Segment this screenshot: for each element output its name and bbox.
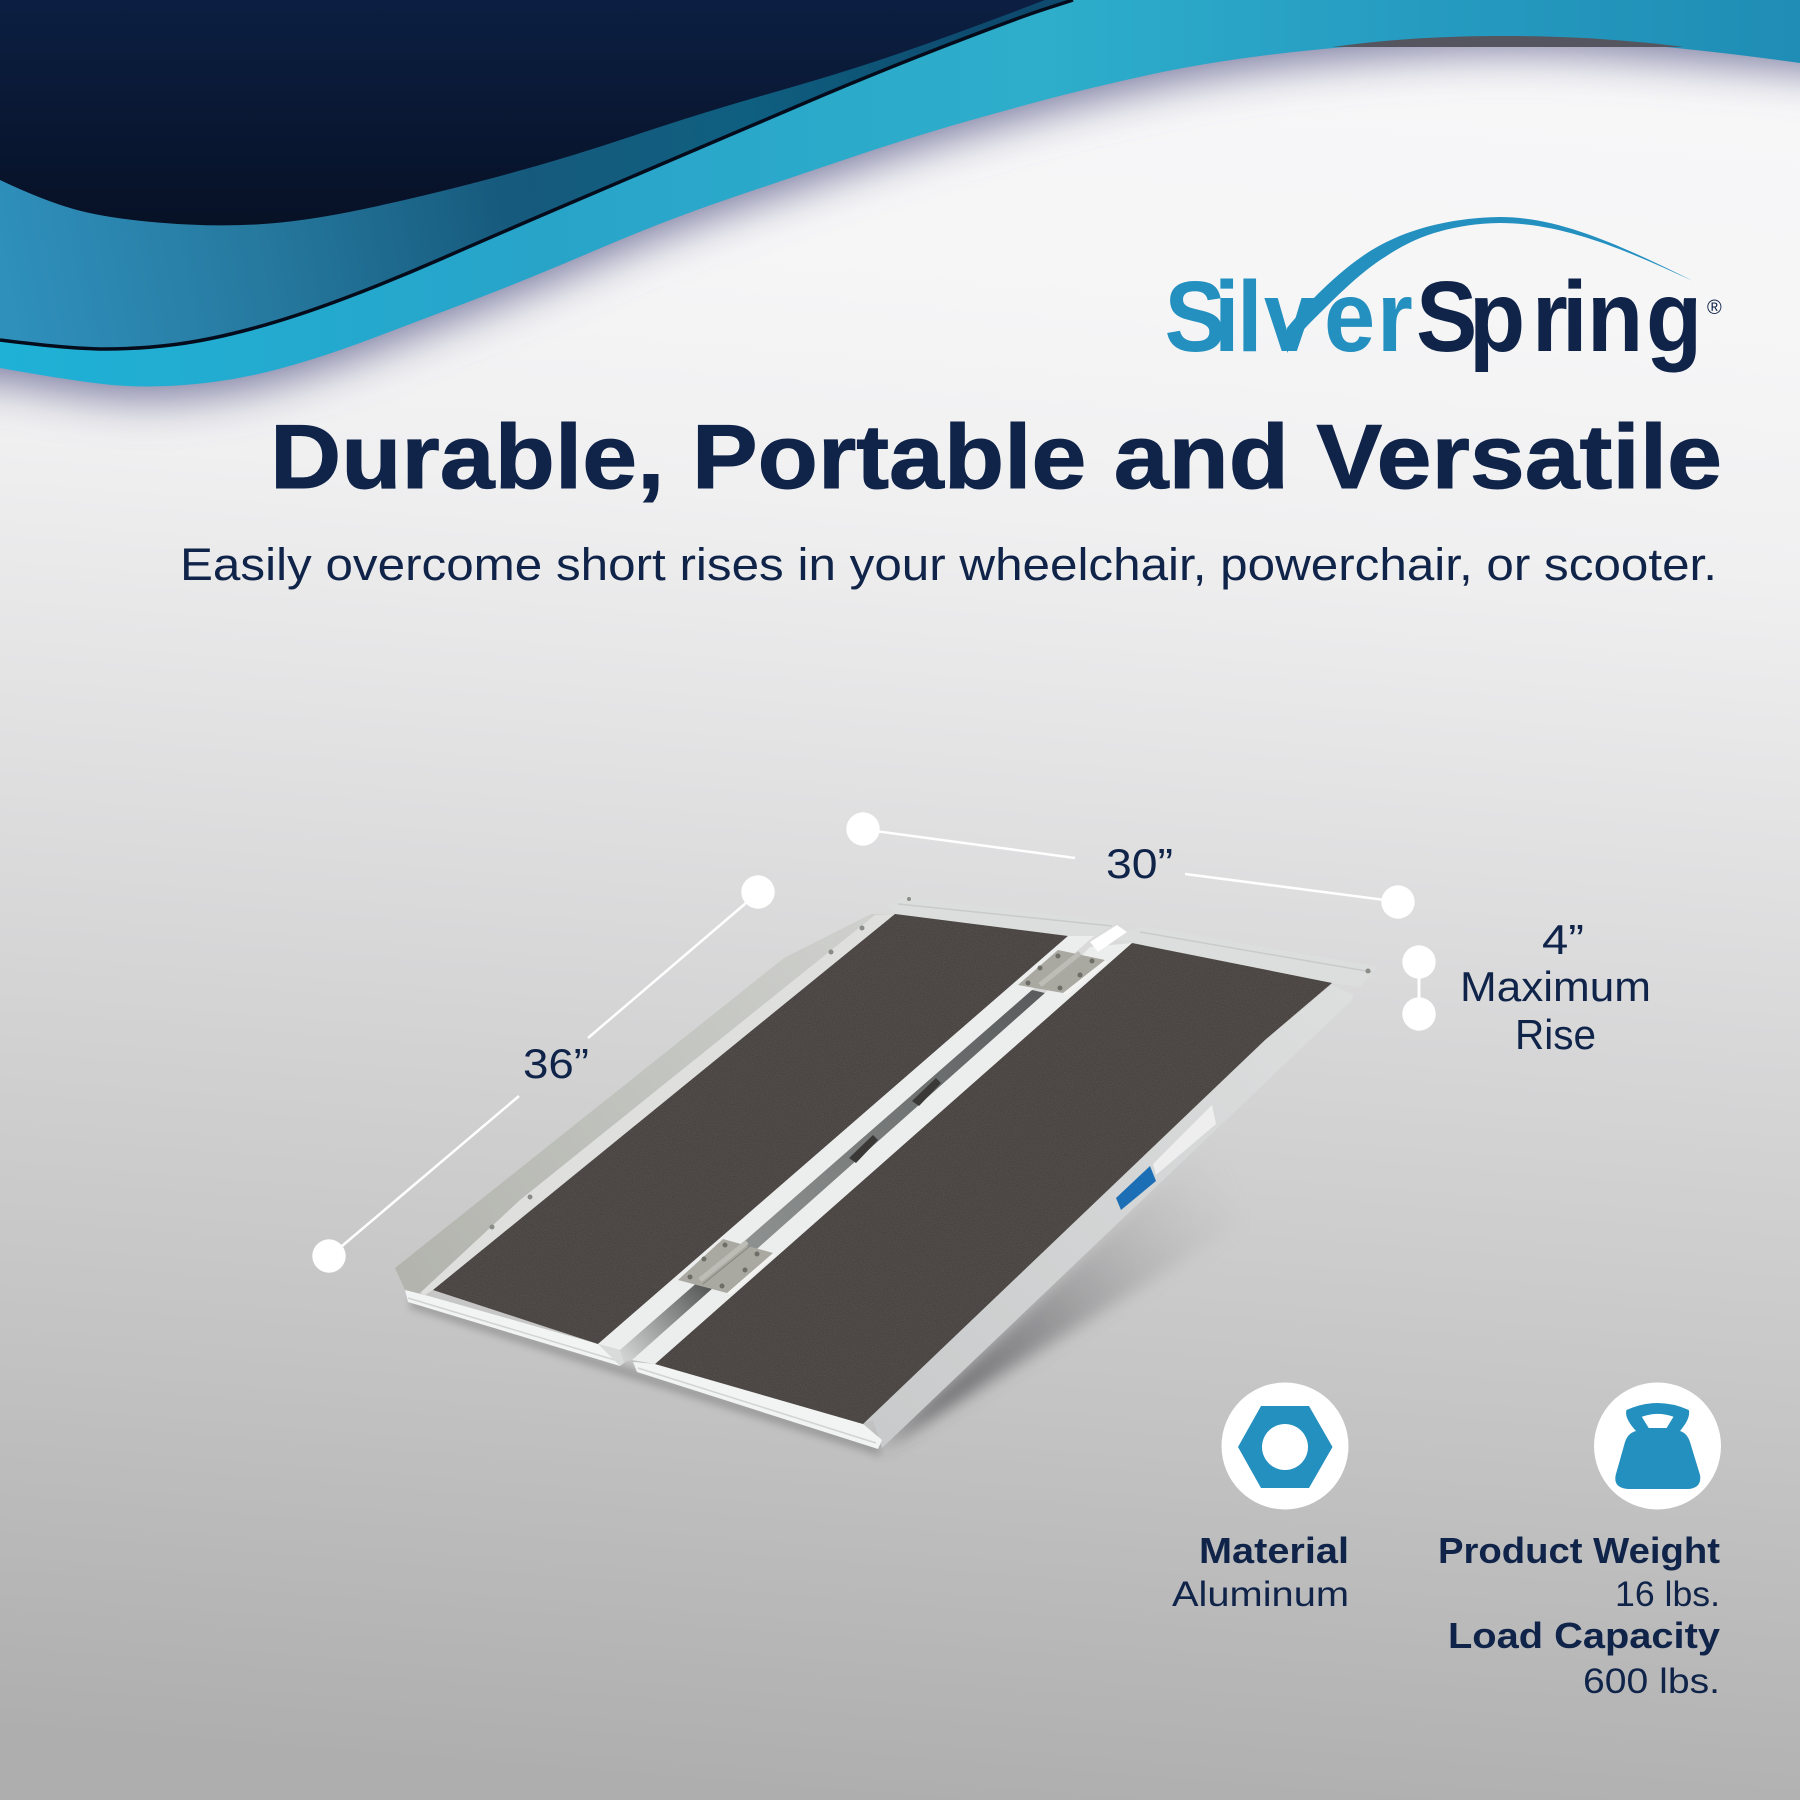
- front edge left: [405, 1290, 620, 1366]
- dimension: 36 inch: 36”: [523, 1040, 589, 1087]
- wave black line: [0, 0, 1073, 349]
- spec: weight and capacity: 600 lbs.: [1583, 1662, 1720, 1701]
- spec: weight and capacity: 16 lbs.: [1615, 1575, 1720, 1614]
- dimension: 36 inch: [312, 875, 775, 1273]
- header wave: [0, 0, 1800, 398]
- logo swoosh: [1287, 217, 1693, 353]
- top frame right: [1117, 926, 1378, 987]
- left bar end face: [598, 1344, 628, 1366]
- dimension: 4 inch maximum rise: 4”: [1542, 916, 1584, 963]
- wave navy shape: [0, 0, 1045, 225]
- white label: [1153, 1105, 1216, 1175]
- subtitle: Easily overcome short rises in your wheelchair, powerchair, or scooter.: [180, 539, 1717, 590]
- non-slip surface left: [433, 914, 1068, 1344]
- left flange lip: [420, 914, 895, 1295]
- dimension: 4 inch maximum rise: Maximum: [1460, 963, 1651, 1010]
- dimension: 4 inch maximum rise: Rise: [1515, 1011, 1596, 1058]
- latch 2: [912, 1078, 941, 1106]
- center bar left: [598, 936, 1094, 1350]
- dimension: 30 inch: 30”: [1106, 840, 1173, 887]
- left flange: [395, 914, 895, 1295]
- spec: material: Material: [1199, 1530, 1349, 1571]
- logo: SilverSpring: Silver: [1165, 261, 1413, 373]
- spec: material: Aluminum: [1172, 1575, 1349, 1614]
- bottom hinge: [678, 1239, 776, 1295]
- icon: weight: [1594, 1382, 1721, 1510]
- title: Durable, Portable and Versatile: [270, 407, 1722, 508]
- dimension: 4 inch maximum rise: [1402, 916, 1651, 1058]
- wave mid blue band: [0, 0, 1073, 349]
- logo: SilverSpring: ®: [1707, 297, 1722, 319]
- right flange: [863, 985, 1353, 1448]
- logo: SilverSpring: [1165, 217, 1722, 373]
- latch 1: [849, 1135, 878, 1163]
- spec: weight and capacity: Product Weight: [1438, 1530, 1720, 1571]
- dimension: 30 inch: [846, 812, 1415, 919]
- top frame left: [887, 898, 1117, 940]
- center bar right: [632, 943, 1132, 1364]
- spec: weight and capacity: Load Capacity: [1448, 1615, 1720, 1656]
- spec: material: [1172, 1530, 1349, 1614]
- spec: weight and capacity: [1438, 1530, 1720, 1701]
- non-slip surface right: [655, 943, 1332, 1424]
- blue label: [1116, 1166, 1156, 1210]
- flange rivets: [490, 897, 1370, 1230]
- icon: hex nut: [1222, 1382, 1348, 1510]
- wave cyan band: [0, 0, 1800, 386]
- wave shadow: [0, 0, 1800, 398]
- grey sliver behind wave: [1332, 36, 1684, 47]
- ramp product illustration: [395, 897, 1378, 1456]
- ramp shadow: [878, 1130, 1240, 1450]
- center gap: [620, 990, 1045, 1362]
- white hinge tab: [1090, 925, 1127, 952]
- logo: SilverSpring: Spring: [1416, 261, 1702, 373]
- front edge right: [633, 1362, 882, 1449]
- top hinge: [1018, 950, 1108, 996]
